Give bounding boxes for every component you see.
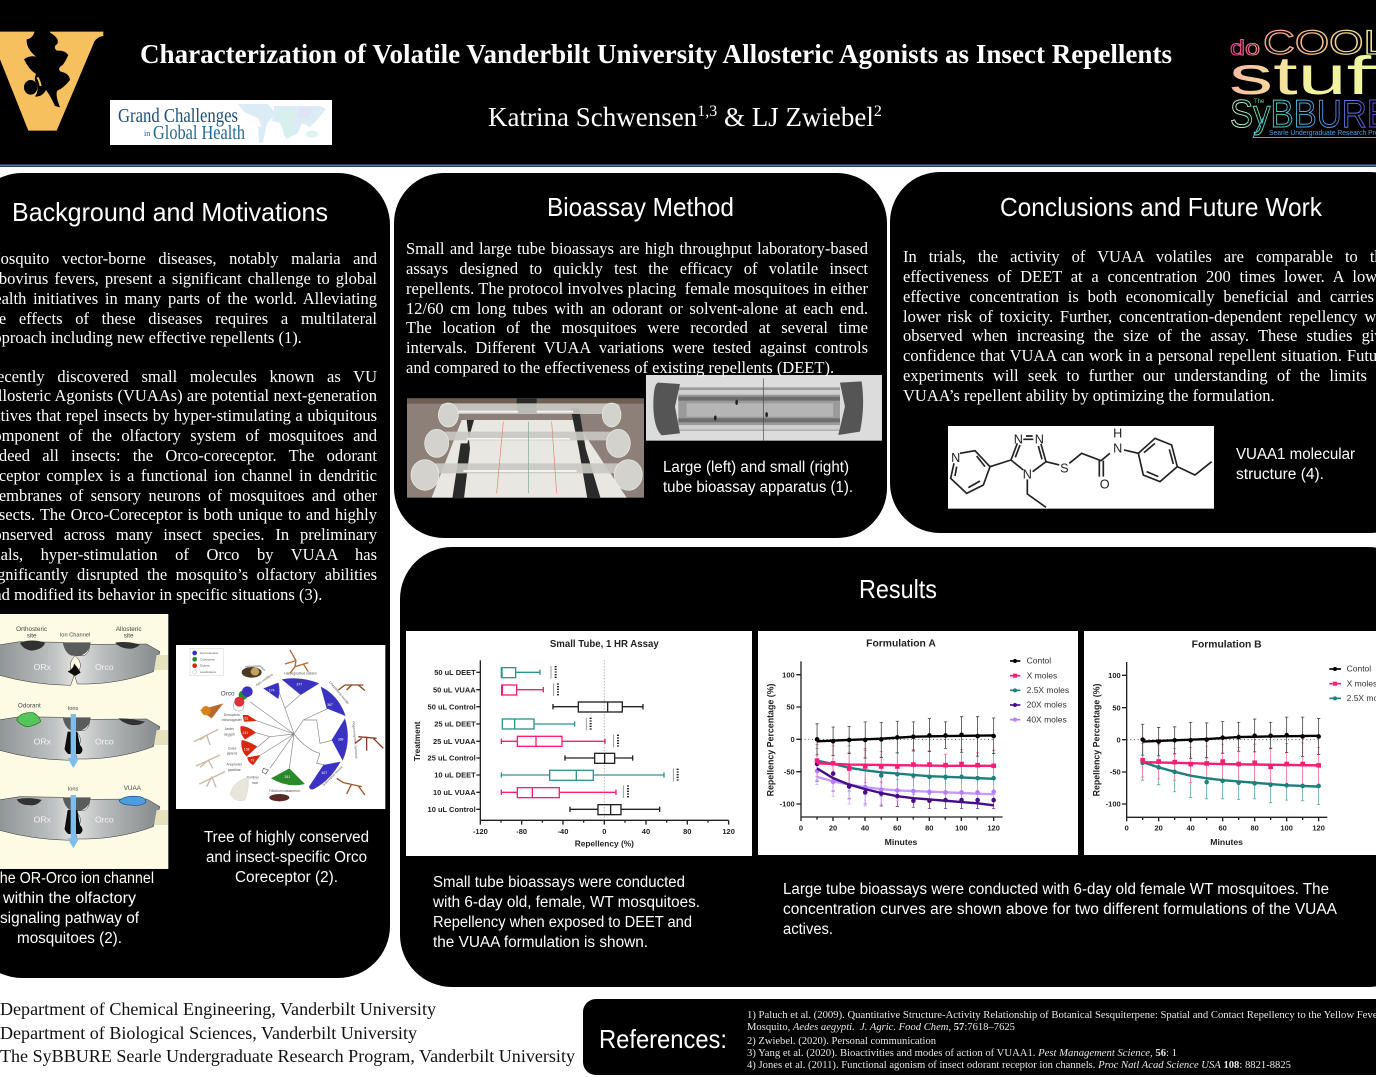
chart: formulation A: 20: [829, 823, 837, 832]
text block: bioassay description: intervals. Different VUAA variations were tested against controls: [406, 338, 868, 357]
reference list: Mosquito, Aedes aegypti. J. Agric. Food Chem , 57:7618–7625: [747, 1022, 1015, 1033]
caption: VUAA1 molecular structure: structure (4).: [1236, 466, 1324, 483]
diagram: Orco phylogenetic tree: gambiae: [228, 768, 241, 772]
diagram: Orco phylogenetic tree: Coleoptera: [200, 657, 215, 661]
caption: large tube results: actives.: [783, 921, 833, 938]
heading: references: References:: [599, 1024, 727, 1054]
diagram: VUAA1 molecular structure: N: [1113, 442, 1122, 456]
diagram: OR-Orco ion channel: Orco: [95, 662, 114, 672]
text block: bioassay description: and compared to the effectiveness of existing repellents (DEET).: [406, 358, 834, 377]
chart: formulation A: 50: [786, 703, 795, 712]
diagram: Orco phylogenetic tree: Diptera: [200, 664, 210, 668]
caption: OR-Orco ion channel: [0, 870, 154, 947]
caption: tree of Orco: and insect-specific Orco: [206, 849, 367, 866]
caption: bioassay apparatus: Large (left) and small (right): [663, 459, 849, 476]
text block: background paragraph two: [0, 366, 377, 604]
heading: conclusions and future work: Conclusions and Future Work: [1000, 192, 1323, 222]
chart: formulation B: 80: [1250, 823, 1259, 832]
logo: Grand Challenges in Global Health: Grand Challenges: [118, 105, 238, 127]
chart: formulation A: 120: [987, 823, 1000, 832]
chart: formulation B: 20: [1154, 823, 1163, 832]
logo: do cool stuff SyBBURE: COOL: [1263, 24, 1376, 62]
reference list: 2) Zwiebel. (2020). Personal communication: [747, 1036, 936, 1047]
authors: Katrina Schwensen1,3 & LJ Zwiebel2: [488, 102, 882, 132]
caption: VUAA1 molecular structure: [1236, 446, 1355, 483]
chart: small tube box plot: 10 uL Control: [428, 805, 476, 814]
caption: tree of Orco: Coreceptor (2).: [235, 869, 338, 886]
text block: bioassay description: 12/60 cm long tubes with an odorant or solvent-alone at each end.: [406, 299, 868, 318]
chart: small tube box plot: 50 uL DEET: [434, 668, 476, 677]
affiliations: [0, 999, 576, 1066]
panel: results: [400, 547, 1376, 987]
chart: formulation A: 40X moles: [1027, 714, 1067, 724]
chart: formulation A: 0: [799, 823, 803, 832]
panel: references: [583, 999, 1376, 1075]
chart: formulation B: -50: [1110, 768, 1121, 777]
diagram: Orco phylogenetic tree: melanogaster: [222, 718, 243, 722]
chart: formulation A: 100: [955, 823, 968, 832]
diagram: Orco phylogenetic tree: Bombyx: [247, 776, 259, 780]
chart: formulation B: 100: [1108, 671, 1121, 680]
diagram: OR-Orco ion channel: Allosteric: [116, 626, 141, 633]
chart: small tube box plot: 25 uL DEET: [434, 720, 476, 729]
diagram: Orco phylogenetic tree: Apis mellifera: [255, 672, 274, 687]
photo: large tube bioassay: [407, 398, 644, 498]
diagram: Orco phylogenetic tree: 407: [322, 771, 327, 775]
caption: OR-Orco ion channel: signaling pathway of: [0, 910, 140, 927]
chart: formulation A: Contol: [1027, 656, 1051, 666]
diagram: VUAA1 molecular structure: N: [1023, 467, 1032, 481]
text block: conclusions: effective concentration is both economically beneficial and carries a: [903, 287, 1376, 306]
diagram: OR-Orco ion channel: Orco: [95, 815, 114, 825]
caption: tree of Orco: [204, 829, 369, 886]
caption: bioassay apparatus: tube bioassay apparatus (1).: [663, 479, 853, 496]
chart: small tube box plot: -120: [473, 827, 488, 836]
diagram: OR-Orco ion channel: ORx: [34, 815, 52, 825]
diagram: Orco phylogenetic tree: Hymenoptera: [200, 651, 218, 655]
heading: results: Results: [859, 574, 937, 604]
diagram: Orco phylogenetic tree: Culex: [228, 746, 237, 750]
chart: formulation B: [1084, 631, 1376, 855]
reference list: 4) Jones et al. (2011). Functional agonism of insect odorant receptor ion channels. Proc Natl Acad Science USA 108: 8821-8825: [747, 1060, 1291, 1071]
caption: bioassay apparatus: [663, 459, 853, 496]
chart: formulation A: 60: [893, 823, 901, 832]
diagram: Orco phylogenetic tree: 399: [338, 738, 344, 742]
reference list: 3) Yang et al. (2020). Bioactivities and modes of action of VUAA1. Pest Management Science, 56: 1: [747, 1048, 1177, 1059]
panel: bioassay method: [394, 173, 887, 538]
chart: formulation B: 0: [1116, 735, 1121, 744]
diagram: Orco phylogenetic tree: mori: [252, 781, 258, 785]
icon: Vanderbilt V logo: [0, 30, 103, 131]
chart: small tube box plot: Repellency (%): [575, 839, 634, 849]
text block: bioassay description: assays designed to quickly test the efficacy of volatile insect: [406, 259, 868, 278]
chart: formulation A: Repellency Percentage (%): [765, 684, 775, 796]
chart: formulation B: 120: [1312, 823, 1325, 832]
diagram: Orco phylogenetic tree: 367: [327, 703, 333, 707]
text block: conclusions: experiments will seek to further our understanding of the limits of: [903, 366, 1376, 385]
diagram: OR-Orco ion channel: Ion Channel: [60, 632, 90, 638]
caption: small tube results: the VUAA formulation is shown.: [433, 934, 648, 951]
logo: do cool stuff SyBBURE: The: [1254, 99, 1265, 105]
diagram: VUAA1 molecular structure: H: [1113, 427, 1122, 441]
panel: conclusions and future work: [890, 172, 1376, 533]
chart: formulation A: 40: [861, 823, 869, 832]
text block: bioassay description: [406, 239, 868, 377]
photo: small tube bioassay: [646, 375, 882, 441]
text block: conclusions: effectiveness of DEET at a concentration 200 times lower. A lower: [903, 267, 1376, 286]
caption: tree of Orco: Tree of highly conserved: [204, 829, 369, 846]
diagram: Orco phylogenetic tree: 79: [250, 758, 254, 762]
affiliations: Department of Chemical Engineering, Vanderbilt University: [0, 999, 437, 1019]
diagram: Orco phylogenetic tree: Anopheles: [226, 763, 243, 767]
caption: large tube results: Large tube bioassays were conducted with 6-day old female WT mosquitoes. The: [783, 881, 1329, 898]
diagram: OR-Orco ion channel: Ions: [68, 786, 79, 792]
diagram: Orco phylogenetic tree: Aedes: [225, 727, 234, 731]
diagram: Orco phylogenetic tree: Orco: [221, 690, 235, 697]
caption: VUAA1 molecular structure: VUAA1 molecular: [1236, 446, 1355, 463]
text block: bioassay description: Small and large tube bioassays are high throughput laboratory-based: [406, 239, 868, 258]
chart: formulation A: 100: [782, 670, 795, 679]
chart: formulation B: 50: [1112, 703, 1121, 712]
caption: OR-Orco ion channel: mosquitoes (2).: [17, 930, 122, 947]
text block: bioassay description: The location of the mosquitoes were recorded at several time: [406, 318, 868, 337]
chart: small tube box plot: -80: [516, 827, 527, 836]
diagram: Orco phylogenetic tree: Drosophila: [224, 713, 240, 717]
logo: do cool stuff SyBBURE: stuff: [1229, 46, 1376, 106]
reference list: 1) Paluch et al. (2009). Quantitative Structure-Activity Relationship of Botanical Sesquiterpene: Spatial and Contact Repellency to the Yellow Fever: [747, 1010, 1376, 1021]
chart: formulation A: -100: [780, 800, 795, 809]
chart: small tube box plot: 0: [602, 827, 606, 836]
diagram: Orco phylogenetic tree: 158: [244, 747, 250, 751]
diagram: VUAA1 molecular structure: [948, 426, 1214, 509]
caption: small tube results: Repellency when exposed to DEET and: [433, 914, 692, 931]
chart: formulation A: Formulation A: [866, 639, 936, 650]
diagram: Orco phylogenetic tree: Pogonomyrmex barbatus: [351, 721, 359, 759]
diagram: Orco phylogenetic tree: 62: [244, 717, 248, 721]
caption: OR-Orco ion channel: within the olfactory: [2, 890, 136, 907]
chart: formulation B: 40: [1186, 823, 1195, 832]
chart: formulation A: -50: [784, 767, 795, 776]
diagram: Orco phylogenetic tree: aegypti: [224, 732, 235, 736]
chart: small tube box plot: 40: [642, 827, 650, 836]
chart: small tube box plot: 120: [722, 827, 735, 836]
chart: formulation A: 2.5X moles: [1027, 685, 1069, 695]
chart: small tube box plot: Small Tube, 1 HR Assay: [550, 639, 659, 650]
diagram: OR-Orco ion channel: Odorant: [18, 703, 41, 710]
affiliations: Department of Biological Sciences, Vanderbilt University: [0, 1023, 418, 1043]
diagram: VUAA1 molecular structure: N: [1035, 432, 1044, 446]
chart: formulation B: 100: [1280, 823, 1293, 832]
diagram: VUAA1 molecular structure: S: [1060, 462, 1069, 476]
panel: background and motivations: [0, 173, 390, 978]
chart: formulation B: 0: [1125, 823, 1129, 832]
chart: small tube box plot: 25 uL Control: [428, 754, 476, 763]
caption: large tube results: [783, 881, 1338, 938]
caption: small tube results: Small tube bioassays were conducted: [433, 874, 685, 891]
diagram: OR-Orco ion channel: site: [124, 632, 134, 639]
diagram: Orco phylogenetic tree: Linepithema humile: [328, 680, 350, 705]
diagram: OR-Orco ion channel: [0, 614, 168, 869]
diagram: Orco phylogenetic tree: Lepidoptera: [200, 670, 216, 674]
chart: small tube box plot: 50 uL Control: [428, 702, 476, 711]
text block: conclusions: lower risk of toxicity. Further, concentration-dependent repellency was: [903, 307, 1376, 326]
chart: formulation A: Minutes: [885, 837, 918, 847]
text block: conclusions: [903, 247, 1376, 405]
chart: small tube box plot: 25 uL VUAA: [433, 737, 476, 746]
diagram: OR-Orco ion channel: site: [27, 632, 37, 639]
diagram: VUAA1 molecular structure: N: [951, 451, 960, 465]
chart: formulation B: Contol: [1347, 664, 1371, 674]
diagram: Orco phylogenetic tree: 341: [285, 775, 290, 779]
diagram: Orco phylogenetic tree: Tribolium castaneum: [269, 789, 300, 793]
chart: small tube box plot: 10 uL DEET: [434, 771, 476, 780]
title: Characterization of Volatile Vanderbilt University Allosteric Agonists as Insect Repellents: [140, 39, 1172, 69]
affiliations: The SyBBURE Searle Undergraduate Research Program, Vanderbilt University: [0, 1046, 576, 1066]
logo: Grand Challenges in Global Health: in: [144, 129, 150, 138]
diagram: OR-Orco ion channel: ORx: [34, 662, 52, 672]
diagram: Orco phylogenetic tree: Solenopsis invicta: [322, 765, 344, 787]
text block: conclusions: observed when increasing the size of the assay. These studies give: [903, 326, 1376, 345]
text block: conclusions: In trials, the activity of VUAA volatiles are comparable to the: [903, 247, 1376, 266]
chart: small tube box plot: 10 uL VUAA: [433, 788, 476, 797]
text block: conclusions: VUAA’s repellent ability by optimizing the formulation.: [903, 386, 1275, 405]
logo: do cool stuff SyBBURE: do: [1230, 37, 1260, 60]
diagram: VUAA1 molecular structure: O: [1100, 477, 1110, 491]
chart: formulation B: Formulation B: [1192, 639, 1262, 650]
chart: formulation B: -100: [1106, 800, 1121, 809]
chart: formulation B: Minutes: [1210, 837, 1243, 847]
caption: small tube results: [432, 874, 700, 951]
diagram: Orco phylogenetic tree: 377: [297, 683, 302, 687]
chart: formulation B: 60: [1218, 823, 1227, 832]
diagram: Orco phylogenetic tree: 131: [243, 731, 248, 735]
chart: formulation A: 0: [790, 735, 795, 744]
chart: small tube box plot: Treatment: [412, 721, 422, 761]
logo: do cool stuff SyBBURE: [1229, 24, 1376, 138]
chart: formulation A: X moles: [1027, 670, 1057, 680]
diagram: VUAA1 molecular structure: N: [1014, 432, 1023, 446]
text block: bioassay description: repellents. The protocol involves placing female mosquitoes in either: [406, 279, 868, 298]
chart: small tube box plot: -40: [558, 827, 568, 836]
header banner: [0, 0, 1376, 167]
chart: small tube box plot: 50 uL VUAA: [433, 685, 476, 694]
caption: large tube results: concentration curves are shown above for two different formulations of the VUAA: [783, 901, 1338, 918]
text block: conclusions: confidence that VUAA can work in a personal repellent situation. Future: [903, 346, 1376, 365]
diagram: OR-Orco ion channel: ORx: [34, 737, 52, 747]
heading: bioassay method: Bioassay Method: [547, 192, 734, 222]
diagram: OR-Orco ion channel: Orco: [95, 737, 114, 747]
text block: background paragraph one: [0, 249, 377, 347]
diagram: Orco phylogenetic tree: pipiens: [227, 752, 238, 756]
diagram: Orco phylogenetic tree: Harpegnathos saltator: [284, 672, 318, 676]
caption: small tube results: with 6-day old, female, WT mosquitoes.: [432, 894, 700, 911]
chart: formulation A: 80: [925, 823, 933, 832]
diagram: OR-Orco ion channel: Ions: [68, 706, 79, 712]
diagram: OR-Orco ion channel: Orthosteric: [16, 626, 47, 633]
chart: small tube box plot: [406, 631, 752, 856]
chart: formulation A: [758, 631, 1078, 855]
reference list: [747, 1010, 1376, 1071]
diagram: OR-Orco ion channel: VUAA: [124, 785, 142, 792]
heading: background and motivations: Background and Motivations: [12, 197, 328, 227]
logo: Grand Challenges in Global Health: Global Health: [153, 122, 245, 144]
logo: Grand Challenges in Global Health: [110, 100, 332, 145]
diagram: Orco phylogenetic tree: 174: [269, 689, 275, 693]
chart: formulation B: Repellency Percentage (%): [1091, 684, 1101, 796]
diagram: Orco phylogenetic tree: [176, 645, 385, 809]
chart: formulation A: 20X moles: [1027, 700, 1067, 710]
chart: small tube box plot: 80: [683, 827, 691, 836]
